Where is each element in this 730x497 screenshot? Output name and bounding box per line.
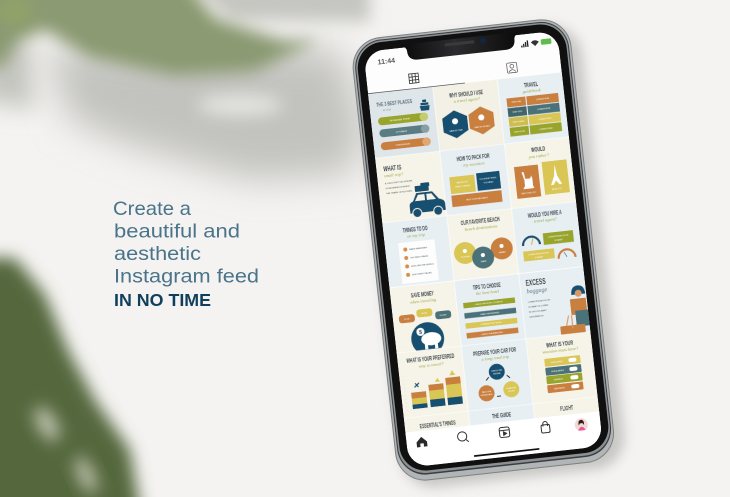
panel: what is your vacation: [526, 332, 598, 404]
panel: why should I use: a travel agent?: [453, 96, 481, 104]
panel: save money: SAVE MONEY: [411, 291, 434, 300]
panel: things to do: DISCOVER PLACES: [412, 271, 432, 276]
panel: essentials things: ESSENTIAL'S THINGS: [420, 421, 456, 430]
panel: would you hire a: LOREM IPSUM DOLOR: [528, 252, 550, 257]
panel: things to do: THINGS TO DO: [403, 226, 428, 235]
icon: piggy bank: [411, 322, 444, 351]
panel: the 3 best places: to visit: [383, 107, 391, 112]
panel: what is your preferred: [397, 346, 468, 418]
panel: excess baggage: SIT AMET IS LOREM: [528, 304, 549, 309]
panel: the guide: THE GUIDE: [492, 412, 511, 420]
panel: excess baggage: LOREM IPSUM DOLOR: [528, 299, 551, 304]
panel: how to pack for: my vacation: [463, 160, 486, 168]
panel: how to pack for: HOW TO PACK FOR: [457, 154, 490, 163]
panel: travel checklist: STEP ONE: [511, 101, 522, 104]
panel: things to do: [382, 216, 454, 288]
text block: headline: aesthetic: [114, 243, 201, 265]
panel: what is small trip: A LONG TRIP FOR LEISURE: [385, 179, 413, 185]
status time: 11:44: [377, 58, 396, 66]
bar chart: [403, 366, 465, 410]
panel: travel checklist: LOREM IPSUM: [538, 118, 552, 121]
phone screen: [363, 31, 603, 468]
panel: what is your vacation: SUNGLASSES: [551, 369, 565, 373]
feed grid: [368, 72, 600, 438]
status bar and tabs: [377, 38, 554, 87]
panel: travel checklist: STEP TWO: [512, 111, 523, 114]
icon: reels: [499, 427, 510, 438]
panel: prepare your car: CHECK THE: [491, 370, 503, 373]
panel: save money: FOOD: [404, 318, 410, 321]
avatar: [574, 418, 588, 432]
grid lines: [368, 72, 599, 433]
panel: the 3 best places: THE 3 BEST PLACES: [376, 99, 413, 109]
icon: grid tab: [409, 73, 419, 84]
panel: our favorite beach: [447, 209, 519, 280]
panel: prepare your car: a long road trip: [481, 354, 510, 362]
icon: home: [416, 436, 428, 447]
place pills: CITY BEACH: [396, 130, 408, 134]
panel: save money: [389, 281, 462, 359]
panel: what is small trip: [375, 151, 447, 223]
hexagon: save my money: [468, 106, 495, 134]
panel: things to do: on my trip: [407, 232, 426, 239]
panel: how to pack for: [440, 144, 511, 216]
panel: would you hire a: travel agent?: [534, 216, 558, 224]
panel: tips to choose: READ THE REVIEWS: [480, 311, 500, 316]
icon: tagged tab: [506, 62, 518, 73]
panel: what is your preferred: way to travel?: [418, 361, 445, 369]
panel: save money: $: [419, 330, 422, 336]
panel: what is your vacation: WHAT IS YOUR: [546, 341, 574, 350]
panel: travel checklist: STEP FOUR: [514, 131, 526, 134]
panel: the 3 best places: [368, 87, 440, 158]
panel: our favorite beach: beach destinations: [464, 223, 498, 232]
panel: travel checklist: LOREM IPSUM: [539, 128, 553, 131]
panel: things to do: EXPLORE THE WORLD: [411, 263, 435, 268]
panel: prepare your car: ENGINE: [493, 373, 501, 376]
phone body: [350, 16, 617, 484]
gauge: orange: [558, 248, 576, 259]
panel: what is your vacation: SUNSCREEN: [551, 361, 563, 364]
text block: headline: Instagram feed: [114, 266, 259, 288]
panel: our favorite beach: HAWAII: [499, 251, 506, 254]
icon: car with luggage: [410, 182, 446, 218]
text block: headline: IN NO TIME: [114, 290, 211, 310]
panel: what is small trip: WHAT IS: [383, 164, 402, 173]
panel: would you hire a: SIT AMET: [554, 238, 564, 242]
panel: travel checklist: LOREM IPSUM: [536, 98, 550, 101]
panel: what is small trip: THE TRAVEL IS INCLUDED: [386, 189, 413, 195]
panel: save money: HOTEL: [421, 312, 428, 315]
panel: what is your vacation: SWIMSUIT: [554, 378, 564, 382]
panel: would you hire a: WOULD YOU HIRE A: [528, 210, 562, 220]
hexagon: save my time: [441, 109, 469, 140]
tab divider: [368, 83, 465, 94]
panel: would you hire a: LOREM IPSUM DOLOR: [548, 234, 569, 239]
panel: excess baggage: IN ORCI SIT AMET: [529, 309, 548, 314]
panel: why should I use: [433, 79, 504, 151]
panel: would you rather: WOULD: [531, 147, 546, 154]
panel: tips to choose: [454, 274, 526, 346]
panel: what is your vacation: vacation must have?: [542, 346, 579, 355]
panel: how to pack for: MAKE A LIST: [456, 180, 469, 185]
gauge: navy: [522, 236, 540, 246]
panel: tips to choose: the best hotel: [476, 288, 500, 296]
panel: travel checklist: TRAVEL: [524, 82, 539, 89]
home indicator: [474, 448, 540, 457]
panel: how to pack for: PACK YOUR BAG EARLY: [466, 196, 489, 202]
panel: save money: when traveling: [410, 297, 437, 305]
panel: excess baggage: baggage: [526, 287, 548, 295]
panel: excess baggage: EXCESS: [525, 276, 546, 288]
panel: the guide: [469, 404, 534, 426]
panel: what is small trip: small trip?: [384, 171, 404, 178]
panel: tips to choose: CHECK THE AMENITIES: [481, 331, 504, 336]
panel: would you hire a: SIT AMET: [535, 255, 544, 259]
panel: our favorite beach: OUR FAVORITE BEACH: [461, 217, 500, 227]
panel: what is small trip: OR BUSINESS IN WHICH: [385, 186, 411, 190]
panel: travel checklist: guidebook: [522, 87, 542, 94]
panel: tips to choose: TIPS TO CHOOSE: [473, 283, 501, 292]
panel: prepare your car: PREPARE YOUR CAR FOR: [473, 347, 517, 358]
panel: would you rather: NEW YORK CITY: [521, 192, 537, 195]
panel: why should I use: SAVE MY MONEY: [474, 124, 491, 129]
panel: flight: [534, 397, 600, 418]
panel: would you hire a: [511, 202, 583, 273]
icon: wifi: [531, 40, 539, 46]
panel: travel checklist: STEP THREE: [513, 121, 525, 124]
place pills: TOWN MUSEUM: [395, 143, 411, 147]
icon: signal: [521, 40, 529, 48]
illustration: woman with suitcases: [560, 285, 590, 335]
panel: save money: FLIGHT: [440, 314, 448, 317]
panel: things to do: MAKE MEMORIES: [409, 246, 428, 251]
panel: our favorite beach: MIAMI: [481, 260, 487, 263]
panel: how to pack for: LIST EVERYTHING: [480, 177, 497, 181]
panel: excess baggage: [519, 267, 590, 339]
phone shadow: [356, 23, 628, 490]
panel: would you rather: PARIS CITY: [552, 187, 563, 191]
panel: why should I use: SAVE MY TIME: [449, 128, 464, 133]
panel: flight: FLIGHT: [560, 406, 574, 413]
notch with speaker and camera: [400, 32, 521, 61]
panel: prepare your car: ESSENTIALS: [481, 393, 493, 397]
phone mockup: [350, 16, 617, 484]
tab bar: [405, 411, 603, 468]
panel: tips to choose: COMPARE THE PRICES: [480, 321, 502, 326]
icon: shop: [541, 421, 550, 433]
panel: what is your vacation: HAPPINESS: [554, 386, 566, 391]
panel: our favorite beach: FLORIDA: [461, 255, 470, 259]
icon: eiffel tower: [551, 165, 562, 186]
panel: essentials things: [404, 411, 471, 438]
panel: would you rather: you rather?: [527, 152, 550, 160]
panel: prepare your car: PLAN THE: [506, 386, 517, 390]
panel: why should I use: WHY SHOULD I USE: [449, 90, 483, 100]
panel: prepare your car: [461, 339, 533, 411]
panel: prepare your car: ROUTE: [508, 390, 516, 393]
text block: headline: [113, 198, 259, 310]
panel: excess baggage: DESTINATION: [529, 314, 544, 319]
icon: ship: [419, 99, 430, 111]
panel: travel checklist: [497, 72, 569, 144]
text block: headline: beautiful and: [114, 220, 240, 242]
icon: search: [457, 431, 469, 443]
arrows: [486, 375, 512, 397]
panel: travel checklist: LOREM IPSUM: [537, 108, 551, 111]
icon: statue of liberty: [522, 171, 534, 189]
panel: what is your preferred: WHAT IS YOUR PREFERRED: [406, 354, 455, 365]
panel: how to pack for: WHAT TO BRING: [455, 184, 471, 189]
panel: would you rather: [504, 137, 576, 209]
text block: headline: Create a: [113, 198, 191, 220]
panel: prepare your car: PACK THE: [482, 390, 492, 394]
panel: tips to choose: CHECK THE HOTEL LOCATION: [475, 300, 503, 306]
panel: things to do: TRY NEW THINGS: [410, 256, 429, 260]
panel: how to pack for: YOU NEED: [483, 181, 494, 185]
icon: battery: [541, 38, 552, 45]
place pills: RESTAURANT STREET: [390, 117, 411, 122]
place pills: [378, 112, 431, 151]
